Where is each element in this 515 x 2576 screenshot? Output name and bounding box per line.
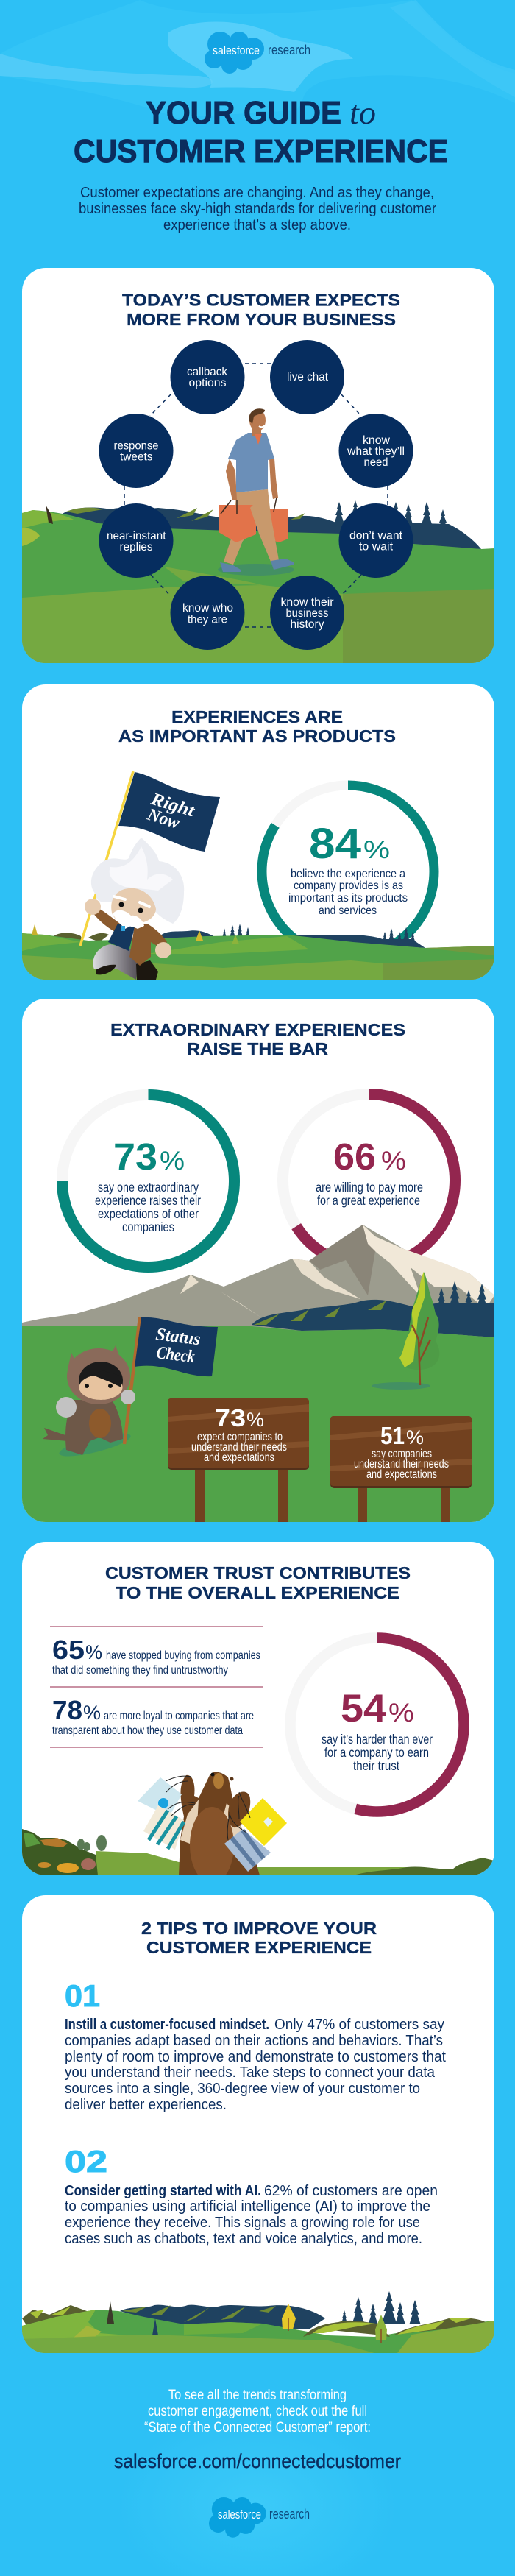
circle: near-instant replies: near-instant — [107, 530, 166, 542]
circle: don't want to wait: to wait — [359, 540, 394, 553]
panel: 2 tips — [22, 1895, 494, 2353]
sign: 73% — [168, 1398, 309, 1522]
logo: salesforce research: salesforce — [213, 43, 260, 57]
circle: response tweets — [99, 414, 174, 488]
sign: 51%: say companies — [372, 1448, 432, 1460]
footer logo: research — [269, 2507, 310, 2522]
circle: know what they'll need: what they’ll — [347, 445, 405, 458]
sign: 73%: % — [246, 1409, 264, 1431]
illustration: flag pole and flag: Right — [148, 790, 198, 821]
tip text: getting started with AI: to companies using artificial intelligence (AI) to improve the — [65, 2198, 430, 2215]
title: CUSTOMER EXPERIENCE — [74, 133, 448, 169]
circle: response tweets: response — [113, 440, 159, 452]
stat: 66%: are willing to pay more — [316, 1180, 423, 1195]
tip text: customer-focused mindset: sources into a single, 360-degree view of your customer to — [65, 2080, 420, 2097]
illustration: flag pole and flag: Now — [144, 805, 182, 833]
sign: 73%: expect companies to — [197, 1431, 283, 1443]
ring chart: 84% — [262, 785, 434, 958]
ring chart: 66% — [283, 1094, 455, 1266]
stat: 65% — [52, 1635, 260, 1677]
footer logo: salesforce — [218, 2508, 261, 2522]
header swoosh decoration — [0, 0, 515, 118]
tip text: customer-focused mindset — [65, 2016, 446, 2113]
stat: 65%: % — [85, 1641, 102, 1663]
sign: 51%: and expectations — [366, 1468, 437, 1481]
sign: 73%: understand their needs — [191, 1441, 287, 1454]
stat: 54% — [322, 1687, 433, 1773]
sign: 51%: % — [406, 1426, 424, 1448]
heading: experiences — [118, 707, 396, 746]
tip text: getting started with AI — [65, 2182, 438, 2247]
circle: know what they'll need: know — [363, 434, 391, 447]
stat: 73% — [95, 1136, 201, 1234]
heading: raise the bar: EXTRAORDINARY EXPERIENCES — [110, 1020, 405, 1039]
heading: customer trust — [105, 1563, 411, 1602]
heading: today's customer: TODAY’S CUSTOMER EXPECTS — [122, 290, 400, 309]
stat: 73%: companies — [122, 1220, 174, 1234]
stat: 65%: have stopped buying from companies — [106, 1649, 260, 1662]
stat: 73%: experience raises their — [95, 1193, 201, 1208]
footer text: “State of the Connected Customer” report: — [144, 2420, 371, 2435]
circle: live chat — [270, 340, 344, 414]
stat: 84%: believe the experience a — [291, 868, 405, 880]
heading: customer trust: CUSTOMER TRUST CONTRIBUTES — [105, 1563, 411, 1582]
divider rules — [50, 1627, 263, 1747]
stat: 78%: 78 — [52, 1695, 82, 1725]
stat: 73%: % — [160, 1147, 185, 1175]
tip text: customer-focused mindset: plenty of room to improve and demonstrate to customers that — [65, 2048, 446, 2065]
heading: tips: 2 TIPS TO IMPROVE YOUR — [141, 1919, 377, 1938]
stat: 78% — [52, 1695, 254, 1737]
tip number: 02: 02 — [65, 2144, 107, 2179]
title: to — [349, 95, 376, 131]
heading: experiences: AS IMPORTANT AS PRODUCTS — [118, 726, 396, 746]
tip text: customer-focused mindset: you understand their needs. Take steps to connect your data — [65, 2064, 436, 2081]
heading: tips: CUSTOMER EXPERIENCE — [146, 1938, 372, 1957]
circle: don't want to wait: don’t want — [349, 530, 403, 542]
circle: know their business history: history — [290, 618, 324, 631]
sign: 73%: and expectations — [204, 1451, 274, 1464]
illustration: Astro mascot with flag: Check — [155, 1343, 196, 1367]
circle: know their business history: know their — [281, 596, 334, 609]
logo: salesforce research: research — [268, 43, 310, 57]
dashed connector ring — [124, 364, 388, 627]
circle: near-instant replies: replies — [119, 541, 153, 553]
circle: know what they'll need — [338, 414, 413, 488]
tip text: getting started with AI: experience they receive. This signals a growing role for use — [65, 2214, 420, 2231]
landscape: mountains, trees and field — [22, 1225, 494, 1522]
tip text: getting started with AI: cases such as chatbots, text and voice analytics, and more. — [65, 2230, 422, 2247]
sign: 51%: understand their needs — [354, 1458, 449, 1471]
footer text: customer engagement, check out the full — [148, 2404, 367, 2419]
circle: know who they are: they are — [188, 614, 227, 626]
tip text: customer-focused mindset: deliver better experiences. — [65, 2096, 227, 2113]
stat: 54%: their trust — [353, 1758, 399, 1773]
illustration: flag pole and flag — [80, 771, 220, 946]
stat: 54%: 54 — [341, 1687, 387, 1730]
illustration: Einstein mascot — [85, 838, 184, 980]
footer text: To see all the trends transforming — [168, 2388, 347, 2403]
report link: salesforce.com/connectedcustomer — [114, 2450, 401, 2472]
stat: 73%: 73 — [113, 1136, 157, 1178]
stat: 73%: expectations of other — [98, 1206, 199, 1221]
illustration: Astro mascot with flag: Status — [154, 1325, 202, 1349]
stat: 78%: % — [83, 1702, 101, 1724]
stat: 66%: 66 — [333, 1136, 376, 1178]
panel: experiences as important as products — [22, 684, 494, 980]
landscape: hills and bushes — [22, 1829, 494, 1875]
footer glow — [118, 2410, 397, 2576]
stat: 84%: important as its products — [288, 892, 408, 905]
intro text: businesses face sky-high standards for delivering customer — [79, 200, 436, 217]
stat: 65%: that did something they find untrustworthy — [52, 1664, 228, 1677]
ring chart: 73% — [62, 1095, 234, 1267]
stat: 84%: company provides is as — [294, 880, 403, 892]
tip text: customer-focused mindset: Only 47% of customers say — [274, 2016, 445, 2033]
sign: 51%: 51 — [380, 1422, 405, 1449]
heading: raise the bar — [110, 1020, 405, 1058]
heading: tips — [141, 1919, 377, 1957]
stat: 66%: for a great experience — [317, 1193, 420, 1208]
stat: 54%: say it’s harder than ever — [322, 1732, 433, 1747]
circle: callback options: options — [188, 377, 227, 389]
illustration: poplar tree — [372, 1272, 439, 1390]
stat: 54%: for a company to earn — [324, 1745, 429, 1760]
stat: 66% — [316, 1136, 423, 1208]
heading: today's customer: MORE FROM YOUR BUSINESS — [127, 310, 396, 329]
heading: experiences: EXPERIENCES ARE — [171, 707, 343, 726]
circle: don't want to wait — [338, 503, 413, 578]
circle: callback options: callback — [187, 366, 227, 378]
footer logo — [209, 2497, 310, 2538]
stat: 78%: transparent about how they use customer data — [52, 1724, 243, 1737]
intro text — [79, 184, 436, 233]
intro text: Customer expectations are changing. And as they change, — [80, 184, 434, 201]
circle: know who they are: know who — [182, 602, 233, 615]
panel: customer expects more — [22, 268, 494, 663]
sign: 73%: 73 — [215, 1404, 246, 1432]
stat: 54%: % — [388, 1699, 414, 1727]
circle: callback options — [171, 340, 244, 414]
landscape: footer hills and trees — [22, 2291, 494, 2353]
stat: 65%: 65 — [52, 1635, 85, 1665]
tip text: getting started with AI: Consider getting started with AI. — [65, 2182, 261, 2199]
circle: response tweets: tweets — [120, 450, 153, 464]
stat: 84%: 84 — [309, 820, 361, 868]
title — [74, 95, 448, 169]
circle: know what they'll need: need — [363, 456, 388, 469]
stat: 66%: % — [381, 1147, 406, 1175]
title: YOUR GUIDE — [146, 95, 341, 131]
circle: know who they are — [171, 576, 244, 650]
ring chart: 54% — [290, 1638, 464, 1812]
illustration: shopper with bags — [218, 408, 294, 576]
tip text: customer-focused mindset: Instill a customer-focused mindset. — [65, 2016, 269, 2033]
landscape: hills and trees — [22, 500, 494, 663]
heading: raise the bar: RAISE THE BAR — [187, 1039, 328, 1058]
illustration: bear with shopping bags — [138, 1772, 287, 1883]
illustration: Astro mascot with flag — [43, 1317, 218, 1461]
circle: live chat: live chat — [287, 371, 329, 383]
tip text: getting started with AI: 62% of customers are open — [264, 2182, 438, 2199]
stat: 84% — [288, 820, 408, 917]
stat: 73%: say one extraordinary — [98, 1180, 199, 1195]
circle: know their business history — [270, 576, 344, 650]
circle: near-instant replies — [99, 503, 174, 578]
heading: today's customer — [122, 290, 400, 329]
tip number: 01: 01 — [65, 1978, 100, 2013]
intro text: experience that’s a step above. — [163, 216, 351, 233]
heading: customer trust: TO THE OVERALL EXPERIENCE — [116, 1583, 399, 1602]
logo: salesforce research — [205, 32, 310, 74]
stat: 84%: % — [363, 836, 390, 864]
panel: customer trust — [22, 1542, 494, 1883]
tip text: customer-focused mindset: companies adapt based on their actions and behaviors. That’s — [65, 2032, 443, 2049]
circle: know their business history: business — [285, 607, 329, 620]
sign: 51% — [330, 1416, 472, 1522]
stat: 84%: and services — [319, 905, 377, 917]
footer text — [144, 2388, 371, 2435]
landscape: rolling hills — [22, 924, 494, 980]
stat: 78%: are more loyal to companies that are — [104, 1710, 254, 1722]
panel: extraordinary experiences — [22, 999, 494, 1522]
